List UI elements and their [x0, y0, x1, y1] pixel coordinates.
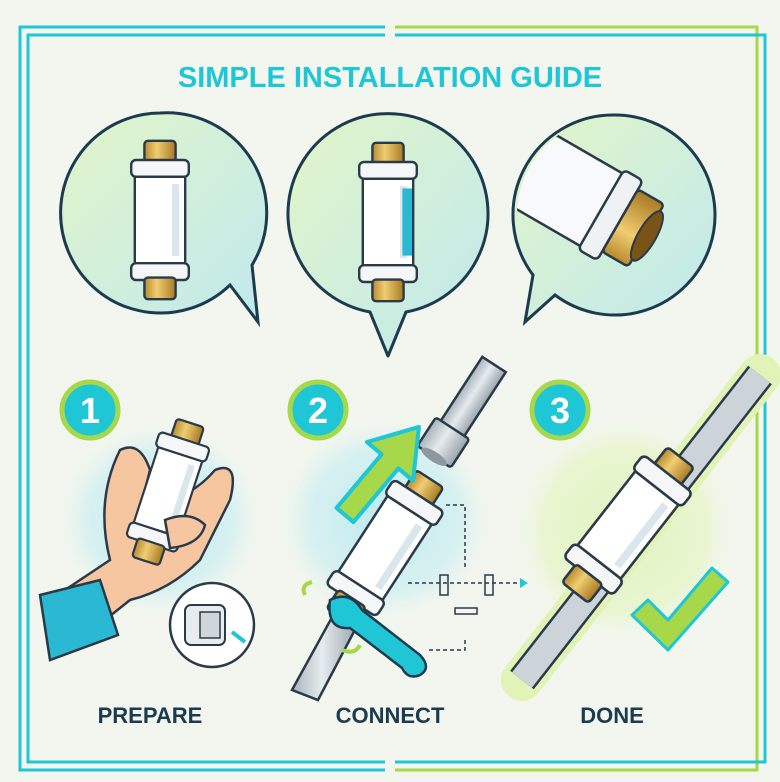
lower pipe — [292, 610, 358, 700]
filter — [315, 462, 455, 634]
step 3 — [510, 375, 760, 728]
badge 3: 3 — [550, 390, 570, 431]
step 2 — [275, 354, 528, 728]
bubble 2: filter side view — [288, 114, 488, 356]
badge 3 — [532, 382, 588, 438]
step 1 — [40, 382, 265, 728]
label done: DONE — [580, 703, 644, 728]
bubble 3: fitting close-up — [496, 115, 715, 322]
badge 2: 2 — [308, 390, 328, 431]
installed pipe with filter — [522, 375, 760, 680]
title: SIMPLE INSTALLATION GUIDE — [178, 62, 602, 94]
check mark — [632, 568, 728, 650]
badge 2 — [290, 382, 346, 438]
label connect: CONNECT — [336, 703, 445, 728]
label prepare: PREPARE — [98, 703, 202, 728]
dashed diagram — [408, 505, 528, 650]
hand holding filter — [40, 415, 233, 660]
upper pipe — [415, 354, 511, 472]
green arrow — [322, 408, 442, 534]
bubble 1: filter front view — [61, 113, 267, 322]
inset fitting — [170, 583, 254, 667]
badge 1: 1 — [80, 390, 100, 431]
badge 1 — [62, 382, 118, 438]
wrench — [304, 582, 426, 676]
